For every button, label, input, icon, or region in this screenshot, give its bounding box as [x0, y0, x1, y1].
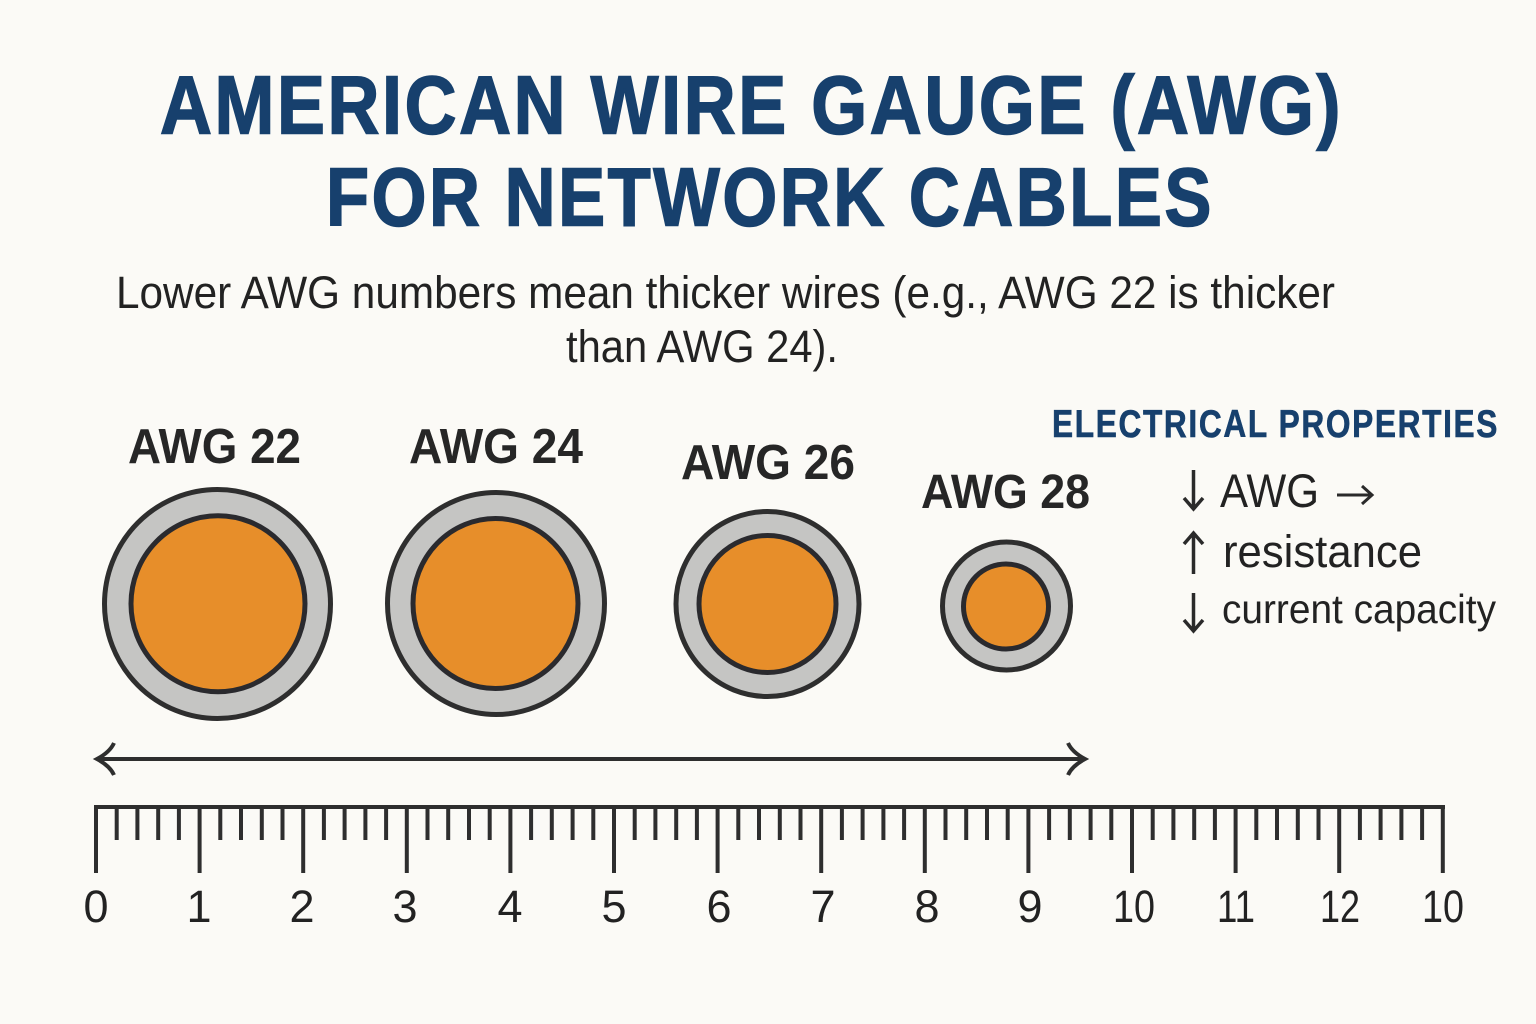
- icon: down arrow, AWG: [1184, 470, 1203, 509]
- ruler numbers: 7: [810, 881, 836, 932]
- conductor: AWG 24: [413, 518, 578, 688]
- ruler numbers: 6: [706, 881, 732, 932]
- ruler numbers: 5: [601, 881, 627, 932]
- ruler: [83, 807, 1464, 932]
- ruler scale line and ticks: [94, 807, 1445, 873]
- ruler numbers: 2: [289, 881, 315, 932]
- title: AMERICAN WIRE GAUGE (AWG): [160, 58, 1343, 152]
- text: current capacity: current capacity: [1222, 586, 1496, 632]
- ruler numbers: 9: [1017, 881, 1043, 932]
- wire: AWG 26: [676, 436, 859, 696]
- wire: AWG 24: [388, 420, 604, 714]
- icon: down arrow, current capacity: [1184, 593, 1203, 631]
- subtitle text block: Lower AWG numbers mean thicker wires (e.g., AWG 22 is thicker: [116, 267, 1335, 318]
- title: FOR NETWORK CABLES: [326, 150, 1214, 244]
- text: AWG: AWG: [1220, 464, 1319, 517]
- icon: up arrow, resistance: [1184, 533, 1203, 574]
- ruler numbers: 1: [186, 881, 212, 932]
- wire: AWG 22: [104, 420, 330, 718]
- label: AWG 24: AWG 24: [409, 420, 583, 474]
- label: AWG 26: AWG 26: [681, 436, 855, 490]
- ruler numbers: 4: [497, 881, 523, 932]
- panel: electrical properties: [1052, 403, 1499, 632]
- conductor: AWG 26: [699, 536, 836, 672]
- ruler numbers: [83, 881, 1464, 932]
- wire: AWG 28: [921, 466, 1090, 670]
- icon: right arrow: [1337, 486, 1372, 504]
- label: AWG 28: AWG 28: [921, 466, 1090, 519]
- conductor: AWG 22: [131, 516, 305, 692]
- text: resistance: resistance: [1223, 526, 1422, 577]
- subtitle text block: than AWG 24).: [566, 321, 838, 372]
- insulation: AWG 26: [676, 512, 859, 696]
- insulation: AWG 22: [104, 490, 330, 718]
- double-headed arrow: [97, 743, 1085, 775]
- ruler numbers: 10: [1422, 881, 1464, 932]
- subtitle text block: [116, 267, 1335, 372]
- label: AWG 22: AWG 22: [128, 420, 301, 474]
- ruler numbers: 10: [1113, 881, 1155, 932]
- ruler numbers: 12: [1320, 881, 1360, 932]
- conductor: AWG 28: [964, 564, 1048, 649]
- insulation: AWG 28: [942, 542, 1070, 670]
- insulation: AWG 24: [388, 492, 604, 714]
- ruler numbers: 3: [392, 881, 418, 932]
- ruler numbers: 8: [914, 881, 940, 932]
- title: [160, 58, 1343, 244]
- ruler numbers: 0: [83, 881, 109, 932]
- ruler numbers: 11: [1217, 881, 1255, 932]
